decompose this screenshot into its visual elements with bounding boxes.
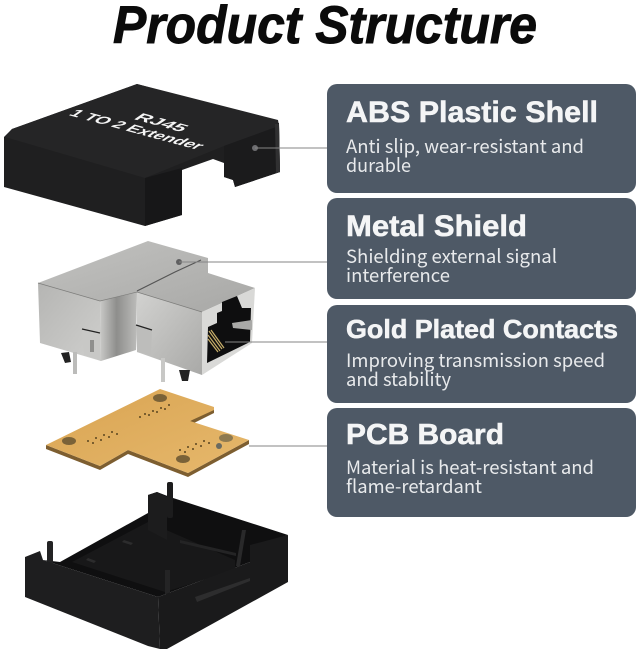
description: Gold Plated Contacts: Improving transmission speed (346, 347, 605, 373)
illustration: ABS plastic top shell (4, 84, 280, 226)
description: Gold Plated Contacts: and stability (346, 366, 451, 392)
leader line: gold plated contacts (225, 341, 327, 343)
gold contact pins (208, 330, 224, 352)
leader line: ABS plastic shell (252, 145, 327, 151)
shell label: 1 TO 2 Extender: 1 TO 2 Extender (65, 108, 208, 152)
description: ABS Plastic Shell: Anti slip, wear-resistant and (346, 133, 584, 159)
illustration: black bottom housing (25, 482, 288, 649)
RJ45 port opening (207, 296, 251, 363)
heading: Gold Plated Contacts: Gold Plated Contacts (346, 314, 618, 344)
heading: PCB Board: PCB Board (346, 419, 504, 451)
panel: PCB Board (327, 408, 636, 517)
leader line: metal shield (176, 259, 327, 265)
leader line: PCB board (249, 445, 327, 447)
panel: Gold Plated Contacts (327, 305, 636, 403)
illustration: metal shield connector (38, 241, 255, 382)
panel: Metal Shield (327, 198, 636, 299)
description: PCB Board: Material is heat-resistant and (346, 454, 594, 480)
heading: ABS Plastic Shell: ABS Plastic Shell (346, 96, 598, 129)
shell label: RJ45: RJ45 (130, 112, 192, 134)
description: ABS Plastic Shell: durable (346, 152, 411, 178)
illustration: PCB board (46, 389, 249, 477)
panel: ABS Plastic Shell (327, 84, 636, 193)
heading: Metal Shield: Metal Shield (346, 210, 527, 243)
description: PCB Board: flame-retardant (346, 473, 482, 499)
description: Metal Shield: interference (346, 262, 450, 288)
description: Metal Shield: Shielding external signal (346, 243, 557, 269)
